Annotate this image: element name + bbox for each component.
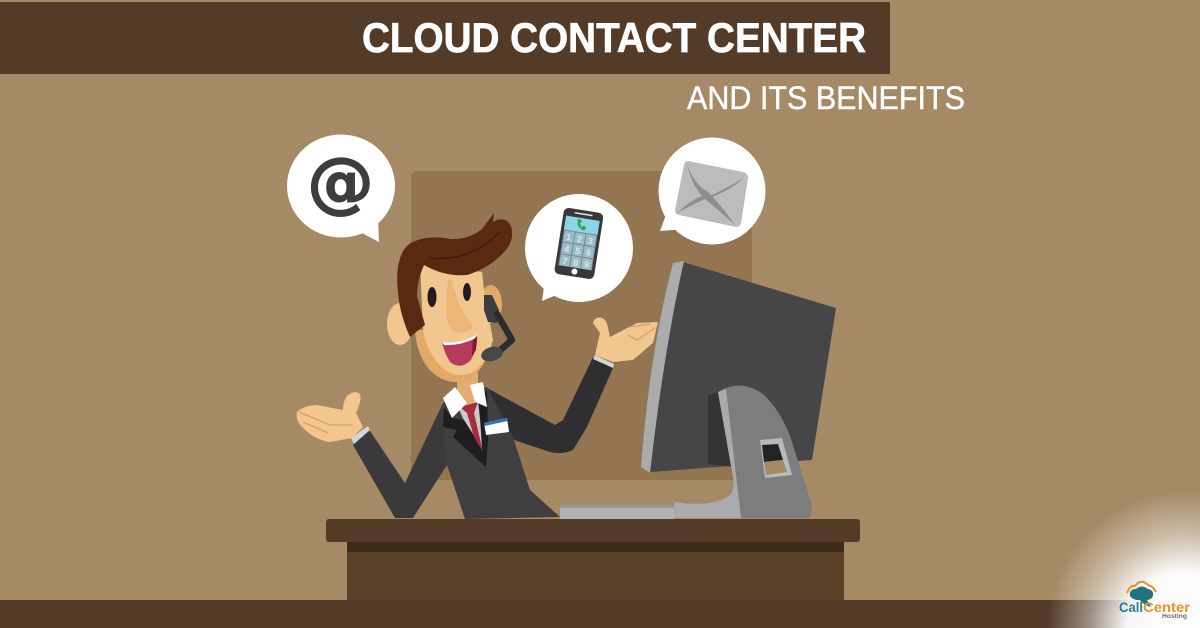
monitor back xyxy=(650,262,836,472)
neck xyxy=(457,372,478,405)
keyboard xyxy=(560,505,674,519)
keypad: 2 xyxy=(576,234,583,244)
desk shadow xyxy=(347,542,844,552)
keypad: 8 xyxy=(573,257,579,268)
hair highlight xyxy=(430,232,500,258)
title banner xyxy=(0,2,890,74)
stand xyxy=(674,385,812,518)
speech bubble: envelope xyxy=(658,138,766,244)
left cuff xyxy=(351,426,370,444)
palm lines xyxy=(299,412,353,433)
keypad: 1 xyxy=(566,232,572,243)
monitor xyxy=(641,261,836,518)
desk body xyxy=(347,540,844,600)
keypad: 4 xyxy=(564,244,570,255)
logo xyxy=(1119,582,1191,620)
right arm xyxy=(487,357,613,453)
left hand xyxy=(297,392,363,442)
icon: at sign: @ xyxy=(307,143,374,221)
agent character xyxy=(297,213,658,519)
stand cutout xyxy=(760,438,792,478)
face xyxy=(420,262,493,375)
logo glow xyxy=(1040,485,1200,628)
headset xyxy=(480,295,512,364)
necktie xyxy=(460,402,483,452)
logo: Center xyxy=(1143,599,1191,615)
floor strip xyxy=(0,600,1200,628)
back wall panel xyxy=(411,171,752,480)
eyes xyxy=(428,283,471,307)
right ear xyxy=(480,285,502,323)
keypad: 9 xyxy=(583,259,590,270)
mouth xyxy=(442,334,477,366)
left arm xyxy=(353,403,447,518)
subtitle: AND ITS BENEFITS xyxy=(687,80,965,116)
title: CLOUD CONTACT CENTER xyxy=(362,14,866,61)
speech bubble: phone xyxy=(525,194,633,302)
face shadow xyxy=(415,330,492,382)
keypad xyxy=(559,231,596,270)
hair xyxy=(397,213,512,337)
stand front strip xyxy=(674,389,741,518)
icon: smartphone xyxy=(554,207,604,280)
ear xyxy=(387,303,413,345)
logo wordmark: Call xyxy=(1119,599,1143,615)
collar xyxy=(443,382,487,418)
lapels xyxy=(443,390,488,467)
stand shadow xyxy=(708,392,736,467)
keypad: 6 xyxy=(585,247,592,258)
icon: envelope xyxy=(675,161,748,227)
shirt xyxy=(458,402,484,452)
desk xyxy=(326,519,860,600)
monitor edge xyxy=(641,261,684,473)
name badge xyxy=(484,418,509,435)
keypad: 3 xyxy=(587,235,594,246)
speech bubble: email at sign xyxy=(287,134,395,242)
keypad: 7 xyxy=(562,256,568,266)
right cuff xyxy=(593,355,614,368)
desk top xyxy=(326,519,860,542)
palm creases xyxy=(628,324,655,340)
logo: Hosting xyxy=(1162,613,1187,620)
icon: cloud xyxy=(1127,582,1156,607)
right hand xyxy=(593,318,658,362)
keypad: 5 xyxy=(574,246,581,256)
nose xyxy=(446,280,473,333)
torso xyxy=(443,387,560,519)
